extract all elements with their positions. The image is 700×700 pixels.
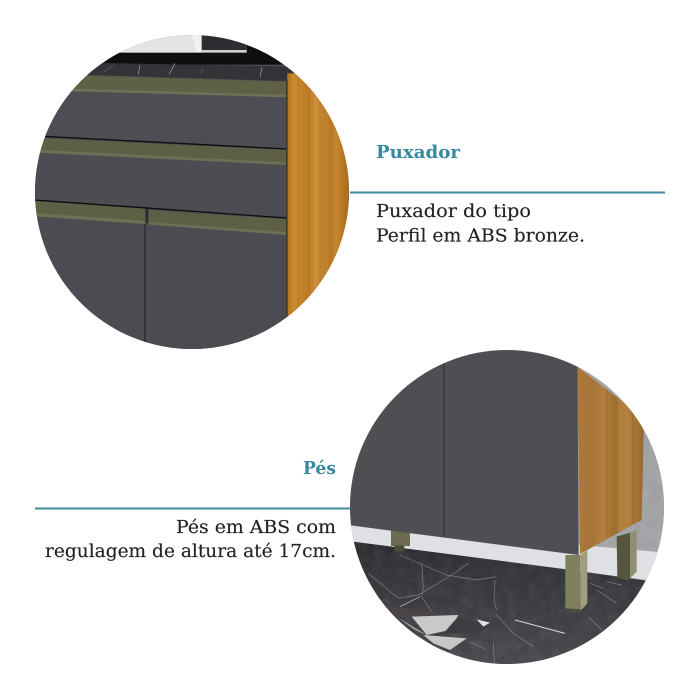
connector line: Pés <box>35 508 350 510</box>
background wall and appliance <box>100 35 284 65</box>
marble floor <box>354 542 646 664</box>
circle photo: cabinet feet <box>350 350 664 664</box>
description: Pés: regulagem de altura até 17cm. <box>45 542 336 562</box>
back left foot <box>391 530 410 551</box>
wood side panel <box>286 73 354 317</box>
front foot <box>565 550 587 613</box>
description: Puxador <box>376 202 585 246</box>
middle drawer front <box>35 152 40 200</box>
door fronts <box>30 215 287 357</box>
concrete wall <box>634 414 664 550</box>
back right foot <box>617 530 637 581</box>
connector line: Puxador <box>350 192 665 194</box>
door fronts <box>340 340 579 555</box>
top handle <box>63 75 287 97</box>
heading: Pés: Pés <box>303 458 336 479</box>
white skirting <box>351 525 658 580</box>
heading: Puxador: Puxador <box>376 142 461 163</box>
description: Pés: Pés em ABS com <box>176 518 336 538</box>
wood side panel <box>577 367 644 554</box>
description: Puxador: Puxador do tipo <box>376 202 531 222</box>
description: Puxador: Perfil em ABS bronze. <box>376 226 585 246</box>
circle photo: drawer handles <box>30 30 357 357</box>
marble countertop <box>80 63 297 81</box>
description: Pés <box>45 518 336 562</box>
top drawer front <box>45 91 72 136</box>
middle handle <box>30 136 287 165</box>
lower handles <box>30 200 287 235</box>
rug <box>383 605 490 650</box>
